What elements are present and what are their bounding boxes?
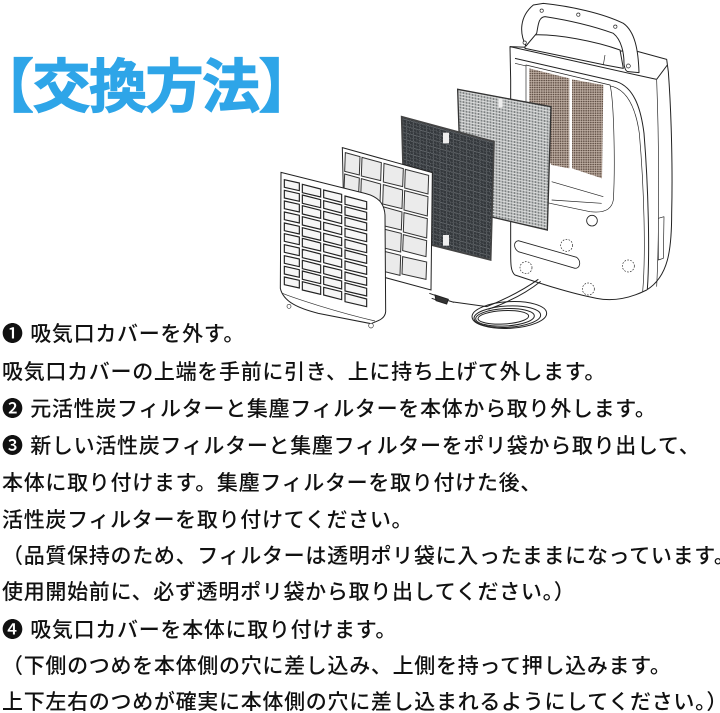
carbon filter xyxy=(402,117,494,260)
mesh filter xyxy=(458,89,551,230)
dehumidifier body xyxy=(510,3,672,300)
step 2: ❷ 元活性炭フィルターと集塵フィルターを本体から取り外します。 xyxy=(2,398,657,421)
slot xyxy=(515,241,580,268)
step 3 note line 1: （品質保持のため、フィルターは透明ポリ袋に入ったままになっています。 xyxy=(2,545,720,568)
inner opening xyxy=(526,65,614,212)
illustration: exploded filter diagram xyxy=(280,2,673,329)
step 4: ❹ 吸気口カバーを本体に取り付けます。 xyxy=(2,619,397,642)
step 3 line 1: ❸ 新しい活性炭フィルターと集塵フィルターをポリ袋から取り出して、 xyxy=(2,435,700,458)
step 3 note line 2: 使用開始前に、必ず透明ポリ袋から取り出してください。） xyxy=(2,581,576,604)
dust filter xyxy=(342,148,432,290)
step 1 detail: 吸気口カバーの上端を手前に引き、上に持ち上げて外します。 xyxy=(2,361,606,384)
step 4 note line 1: （下側のつめを本体側の穴に差し込み、上側を持って押し込みます。 xyxy=(2,655,672,678)
side notch xyxy=(658,217,664,260)
step 3 line 3: 活性炭フィルターを取り付けてください。 xyxy=(2,509,413,532)
top flap xyxy=(525,35,623,68)
instructions text block xyxy=(2,323,720,713)
handle xyxy=(522,3,639,73)
front intake cover xyxy=(280,172,386,328)
step 3 line 2: 本体に取り付けます。集塵フィルターを取り付けた後、 xyxy=(2,472,542,495)
dashed screw marks xyxy=(520,239,634,295)
brown filter mesh xyxy=(529,68,569,168)
knob xyxy=(587,215,597,226)
main shell xyxy=(510,47,672,300)
power cord xyxy=(429,279,547,330)
step 1 heading: ❶ 吸気口カバーを外す。 xyxy=(2,323,245,346)
